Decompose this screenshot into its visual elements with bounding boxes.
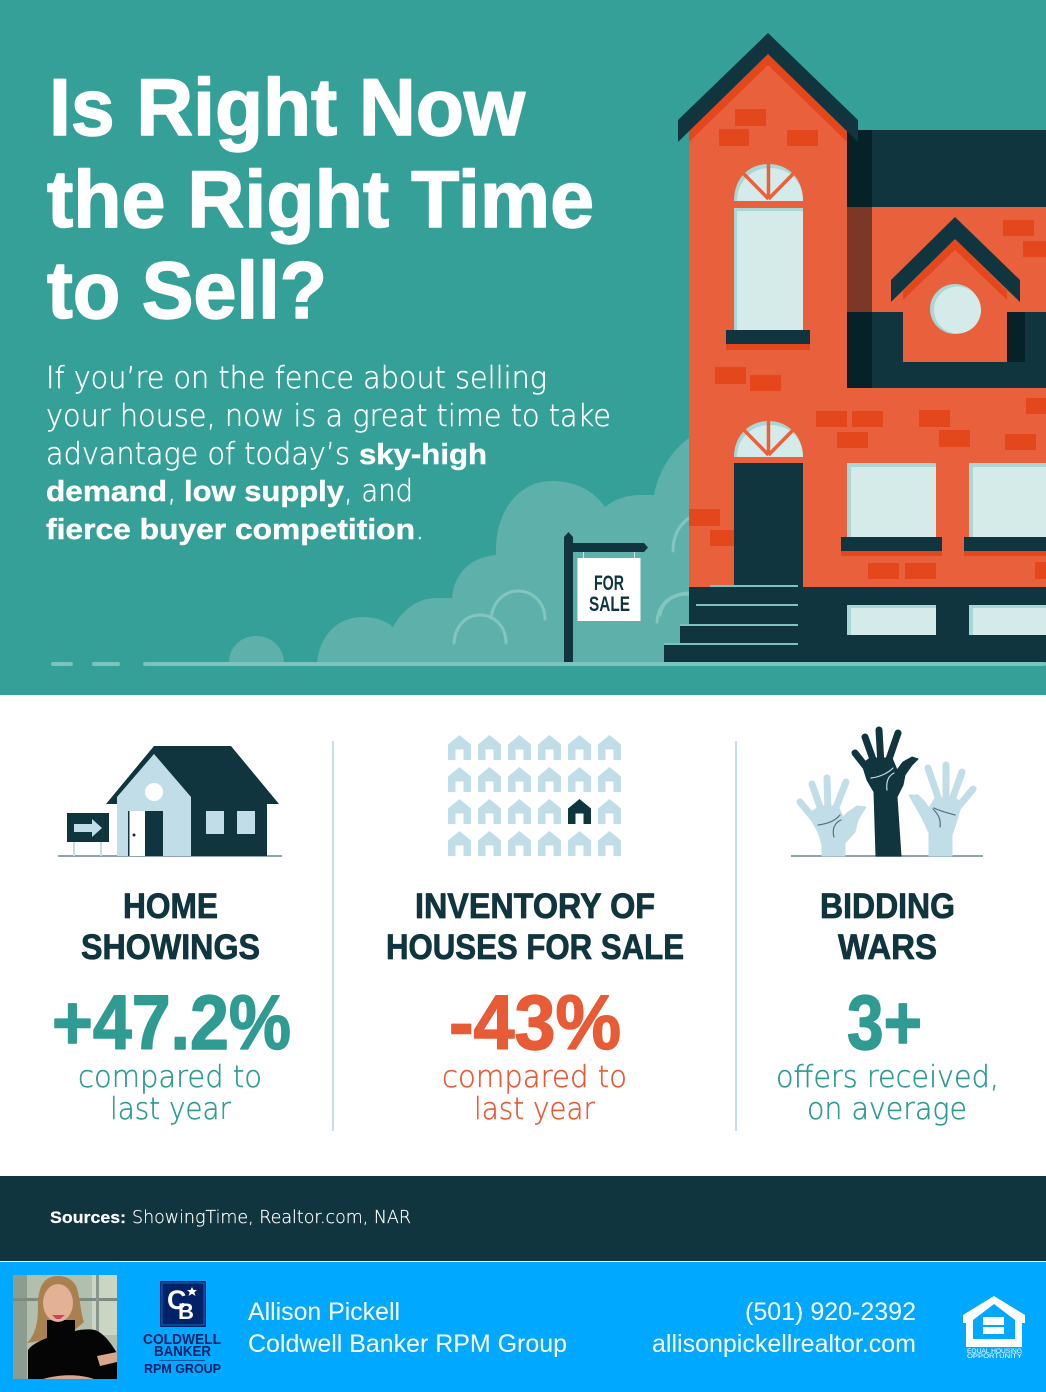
title: the Right Time (47, 155, 594, 245)
right hand (909, 765, 973, 856)
icon: equal housing opportunity (963, 1296, 1025, 1360)
panel: agent footer (0, 1262, 1046, 1392)
panel: hero (0, 0, 1046, 695)
column: bidding wars (776, 730, 999, 1127)
tower window (726, 163, 810, 350)
lower roof band (847, 312, 1046, 388)
icon: house with arrow sign (58, 746, 282, 857)
left hand (800, 778, 866, 856)
intro text: demand (46, 476, 167, 508)
heading: HOME (123, 887, 218, 926)
for sale sign: SALE (589, 593, 630, 616)
agent name and company (248, 1298, 567, 1358)
title: Is Right Now (49, 63, 526, 153)
tower roof trim (689, 54, 847, 142)
intro text: , and (344, 474, 413, 509)
coldwell banker logo: BANKER (154, 1344, 211, 1360)
heading (386, 887, 684, 967)
icon: raised hands (791, 730, 983, 857)
column: home showings (52, 746, 291, 1127)
intro text: If you’re on the fence about selling (46, 361, 547, 396)
intro text: , (167, 474, 177, 509)
sources text: Sources: (50, 1208, 126, 1227)
for sale sign (564, 532, 648, 662)
foundation and steps (664, 585, 1046, 662)
door and fanlight (734, 420, 803, 587)
icon: equal housing opportunity: EQUAL HOUSING (967, 1348, 1022, 1355)
heading (81, 887, 260, 967)
coldwell banker logo: C (167, 1285, 186, 1315)
column: inventory (386, 735, 684, 1127)
heading: BIDDING (820, 887, 955, 926)
tower roof (678, 33, 858, 142)
intro text: sky-high (359, 439, 487, 471)
caption (776, 1060, 999, 1127)
agent name and company: Allison Pickell (248, 1298, 400, 1326)
heading (820, 887, 955, 967)
panel: stats (0, 695, 1046, 1176)
agent name and company: Coldwell Banker RPM Group (248, 1330, 567, 1358)
agent photo (13, 1275, 117, 1379)
stat: 3+: 3+ (847, 980, 922, 1066)
caption: compared to (78, 1060, 262, 1095)
icon: grid of houses (448, 735, 621, 856)
caption: last year (474, 1092, 595, 1127)
caption (442, 1060, 627, 1127)
dormer (891, 217, 1025, 362)
caption: last year (110, 1092, 231, 1127)
heading: INVENTORY OF (415, 887, 655, 926)
agent contact: (501) 920-2392 (745, 1298, 916, 1326)
stat: -43%: -43% (449, 980, 621, 1066)
bricks (689, 109, 1046, 579)
intro text: fierce buyer competition (46, 514, 415, 546)
heading: SHOWINGS (81, 928, 260, 967)
caption: offers received, (776, 1060, 999, 1095)
caption: compared to (442, 1060, 627, 1095)
heading: WARS (838, 928, 937, 967)
road (51, 662, 1046, 666)
stat: +47.2%: +47.2% (52, 980, 291, 1066)
house illustration (664, 33, 1046, 662)
intro text: low supply (184, 476, 344, 508)
coldwell banker logo (143, 1281, 221, 1376)
sources text: ShowingTime, Realtor.com, NAR (132, 1207, 411, 1228)
bushes (229, 438, 689, 663)
for sale sign: FOR (594, 572, 624, 595)
intro text (46, 361, 611, 547)
caption: on average (807, 1092, 967, 1127)
intro text: . (415, 512, 425, 547)
middle hand (855, 730, 918, 856)
icon: equal housing opportunity: OPPORTUNITY (967, 1353, 1023, 1360)
coldwell banker logo: COLDWELL (143, 1332, 221, 1348)
intro text: advantage of today’s (46, 437, 350, 472)
intro text: your house, now is a great time to take (46, 399, 611, 434)
coldwell banker logo: RPM GROUP (144, 1361, 221, 1376)
upper wall (872, 207, 1046, 312)
agent contact (652, 1298, 916, 1358)
caption (78, 1060, 262, 1127)
tower and lower wall (689, 54, 1046, 587)
upper windows (841, 463, 1046, 556)
agent contact: allisonpickellrealtor.com (652, 1330, 916, 1358)
main roof (847, 130, 1046, 207)
title: to Sell? (47, 246, 327, 336)
panel: sources (0, 1176, 1046, 1261)
coldwell banker logo: B (178, 1299, 194, 1324)
title (47, 63, 594, 336)
heading: HOUSES FOR SALE (386, 928, 684, 967)
